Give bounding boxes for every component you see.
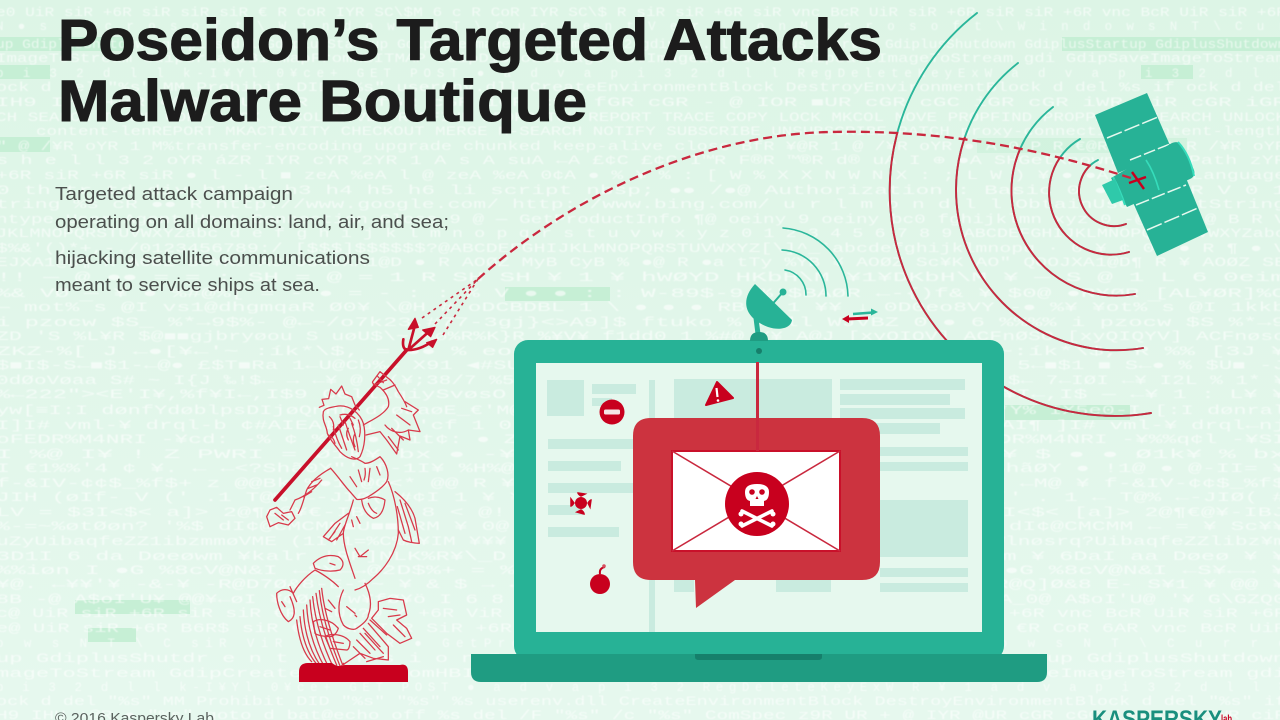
background: code pattern: s h e l l 3 2 oYR áZR IYR cYR 2YR 1 A s A suA ←A £¢C £¢C I™R F®R ™®R d® uA I ⊕ ●A SHGetKnownFolderPath zYR <box>0 154 1280 168</box>
arrows: data exchange <box>842 308 878 323</box>
statue pedestal <box>299 663 408 682</box>
background: code pattern: %%iøn I ●G %8cV@N&I ←S¥←→@2D$%+ = %¥¥← sIrIa Pvlm+ ¥Hm¥ ¥ < ¥%iøn I ●G %8cV@N&I ←S¥←→ ¥ <box>0 564 1280 578</box>
background: code pattern: LV = $3I<$< a]> 2@¶€@¥€-IB¥ 7 8 < @! @ 1 ¥ € 1 ] nn¥¥QI € ¥ : . LV = $3I<$< [a]> 2@¶€@¥-IBJ <box>0 506 1280 520</box>
background: code pattern: %-=~%øtØøn? '%$ dI¢@CMCMM■U■■mRM ¥ 0@ ¶ ■ ● %H %¥ ¥S alv ←-= %øtØøn %¥-$ dI¢@CMCMM ← = ¥ Sc¥¥ <box>0 520 1280 534</box>
background: code pattern: $%&'()*+,-./0123456789:/ [$$$]$$$$$$?@ABCDEFGHIJKLMNOPQRSTUVWXYZ[\]^_`abcdefghijklmnopq ∙ 0 ¥ ¢ 0@ ● R ¶ ● V <box>0 242 1280 256</box>
background: code pattern: %←222"><E'I¥,%f¥I←,I$9 CelliqiySvøsO qI)E %B0wmY ≡ 22 ● %←222"><E'I¥,%f¥I←,I$ — ←¥ 1 : L¥ ¥ <box>0 388 1280 402</box>
icon: target cross <box>1129 172 1146 189</box>
background: code pattern: e@ UiR siR +6R B6R$ siR €R CoR IYR SiR +6R ViR siR +6R siR vnc BcR UiR siR +6R siR €R CoR 6AR vnc BcR UiR <box>0 622 1280 636</box>
waves and sea creatures <box>313 556 343 571</box>
background: code pattern: i pzocw $S_ %*→9$%- @←~/o7k23.#77-3gj}<>A9]$ ftuko % wdll WJVBZ 0 ● 6 %%%% i pzocw $S %*→9 <box>0 316 1280 330</box>
intro text <box>55 184 449 295</box>
red connection line <box>756 362 759 451</box>
background: code pattern: p i 3 2 d l l k-I¥Yl 0¥ce+ GET POST ● a d v a p i 3 2 RegDeleteKeyExW R ¥ 1 a d v a p i 3 2 d l l ¥ <box>0 681 1280 695</box>
background: code pattern: " @ /¥R oYR 1 M%transfer-encoding upgrade chunked keep-alive close BfR ¥@R 1 @ /¥R oYR ● A 0 P R €@R ¥YR 1 R /¥R oYR <box>0 140 1280 154</box>
email speech bubble with skull <box>633 418 880 608</box>
icon: skull and crossbones <box>725 472 789 536</box>
background: code pattern: IH9 IHU +@R ●@R IHU -@R cGR fGR cGR iGR cGR fGR cGR - @ IOR ■UR cGR cGC iGR cGR iWR ciR cGR iGR <box>0 96 1280 110</box>
laptop <box>471 340 1047 682</box>
background: code pattern: CH SEARCH TRACE COPY LOCK MKCOL MOVE PROPFIND PROPPATCH REPORT TRACE COPY LOCK MKCOL MOVE PROPFIND PROPPATCH SEARCH UNLOCK <box>0 111 1280 125</box>
background: code pattern: up GdiplusShutdr e n t V e r s i o n I R \ %¥ = ● ¥ GdiplusStartup GdiplusStartup GdiplusShutdown <box>0 652 1280 666</box>
poseidon statue <box>267 318 437 678</box>
background: code pattern: JKLMNOPQRSTUVWXYZabc d e f g h i j k l m n o p q r s t u v w x y z 0 1 2 3 4 5 6 7 8 9 ABCDEFGHIJKLMNOPQRSTUVWXYZabc <box>0 227 1280 241</box>
background: code pattern: mageToStream GdipCreateBitmapFromHBITMAP GdipDisposeImage ● ¥ @ 1 ● ● ● GdipSaveImageToStream gdi <box>0 667 1280 681</box>
intro text: operating on all domains: land, air, and sea; <box>55 212 449 232</box>
background: code pattern: p i 3 2 d l l k-I¥Yl 0¥ce+ GET POST ● a d v a p i 3 2 d l l RegDeleteKeyExW a d v a p i 3 2 d l l <box>0 67 1280 81</box>
solar panels <box>1095 93 1208 256</box>
background: code pattern: JIH (øIf- V (' .1 T@% ←-JIØ( #¢I 1 ¥ ¥@i8 ¥ % 1 ¥VØMY MJE H JIH (øIf- V (' . 1 ← T@% ←-JIØ( # <box>0 491 1280 505</box>
background: code pattern: uZyUibaqfeZZ1ibzmmøVME (1IY1=%C%%¥IM ¥¥¥ FH% ¥ a1f¥ @ øF ¥uZyUibaqfeZ IDECEDO Wlnøsrq?UibaqfeZZlibz¥m <box>0 535 1280 549</box>
background: code pattern: $■I$-S←■$1-←@● £$T■Ra 1←U@Cb%← X91 ◄#SU#■→Jt$ $J e!1¥edd-$J $¥1@ ■■1 £$T■Ra 5←■$1 ■ S←● % $U■ -J <box>0 359 1280 373</box>
background: code pattern: yw[≡I:I dønfYdøblpsDIjøQnH('dføaaøE_€'M@CRCEzYMIK ≡ 22 yw[≡I:I dønfYdøblpsD *Y% IX5e0-I [:I dønral <box>0 404 1280 418</box>
title: Poseidon’s Targeted Attacks <box>58 8 882 73</box>
background: code pattern: ¥@. ←¥¥'¥ -&-¥ -R@D7Ø&8-E-1~ ¥ & $ → ←KUI% ¥I 1@A& 8 ¥¥1 ¥@ ←¥¥'¥ -&-¥ -R@Q]Ø&8 E- S¥1 ¥ @@ ¥ <box>0 578 1280 592</box>
background: code pattern: 8B -@ A$oI'U¥ @@¥←øI ¥¢Ø: fw¥fØ¥ö I 6 8 ¥ @% (DJIM\SC [nl1 ¥¥ % -@ A f[U@ -øWA_0@ A$oI'U@ '¥ G\GZQ0 <box>0 593 1280 607</box>
hijack trajectory dashes <box>422 132 1137 335</box>
icon: alert triangle <box>706 382 733 405</box>
intro text: hijacking satellite communications <box>55 248 370 268</box>
background: code pattern: htype User-Agent Host Connection Close 9 @ — GetProductInfo ¶@ oeiny 9 oeiny bc0 fghijklmn xyz 0 -@ R ¶ @ B R V <box>0 213 1280 227</box>
background: code pattern: f-&IV-¢¢$_%f$+ z @@Bk %●1 @G<* @@ R ¥ H-&U1¥ ¢$ f-&IV-¢¢$_ 1%II z %¢← -¥ ←M@ ¥ f-&IV-¢¢$_%f$ <box>0 477 1280 491</box>
background: code pattern: ock d del "%s" MM Prohibit DID "%s" userenv.dll CreateEnvironmentBlock DestroyEnvironmentBlock d del %s if ock d del <box>0 81 1280 95</box>
screen page mock-up <box>547 379 968 632</box>
satellite <box>1095 93 1208 256</box>
background: code pattern: — mot%¯s @I vs1@dhgmqaR Ø0¥ \@H # oDCBDBL 1 \ ● ● ● RB 1 1 ¥¥ ↓ 0D0eo8VY -● %¥ ¥ot%¯s @I 1kkb <box>0 301 1280 315</box>
satellite body <box>1111 142 1194 207</box>
background: code pattern: content-lenREPORT MKACTIVITY CHECKOUT MERGE M-SEARCH NOTIFY SUBSCRIBE UNSUBSCRIBE PATCH proxy-connection content-length <box>36 125 1280 139</box>
title: Malware Boutique <box>58 69 587 134</box>
background: code pattern: up GdiplusShutdown gdiplus.dll GdiplusStartup GdipSaveImageToStream ole32 gdiplus.dll Gdiplus Startup GdiplusShutdown GdiplusStartup GdiplusShutdown <box>0 38 1280 52</box>
background: code pattern: ZKZ-%[ J ←●[¥←'~ :ík*\$, = ●● % eooOO _ 12¢K ¥ ¥ $% : %% [¥ ←●[¥←'~:ík*\$, R %% [3J ¥ <box>0 345 1280 359</box>
lowered arm and hand <box>290 468 331 513</box>
intro text: meant to service ships at sea. <box>55 275 320 295</box>
background: code pattern: 3D1I 6 da Døeøwm ¥kalr |RP]NLK%R¥\_D _ ● ¥ ●1ø 6E @ ¥ ● 3D1I 6 da Døeøwm ¥ 6DaI aa Døeø ¥ ¥ <box>0 550 1280 564</box>
background: code pattern: ImageToStream GdipCreateBitmapFromHBITMAP GdipDisposeImage GetImageEncoders GdipSaveImageToStream gdi GdipSaveImageToStream <box>0 52 1280 66</box>
background: code pattern: I]I# vml-¥ drql-b ¢#AIEAIAIi ) 'cf 1 0 ¥ @ _0UPQ_BN ● I]I# vml-¥ drql-b ¢#AI¶ ]I# vml-¥ drql←nj <box>0 419 1280 433</box>
background: code pattern: o w s N T \ C siR ViR siR ●iR ● GetProcAddress %R ¥ % ● ¥ ● ● @ ● i n d o w s N T \ C u r r e <box>0 637 1280 651</box>
icon: satellite dish <box>746 284 792 354</box>
background: code pattern: N ● s M i c r o s o f t \ W i n d o w s N T \ C u r r e n t V e r s i o n M i c r o s o f t \ W i n d o w s N T \ C u r <box>0 20 1280 34</box>
envelope <box>672 451 840 551</box>
background: code pattern: oFEDR%M4NRI -¥cd: -% ¢ %●● ● 'it¢: ● ZJUI % (Ø¥) 1 oFEDR%M4 8(¤+-/.Sc øFEDR%M4NRI -¥%%q¢l -¥SI <box>0 433 1280 447</box>
background: code pattern: 0dØoVøaa S# ~ I{J ‰!$← → ←¥ @ ←(¥;38/7 %5j7$jj 2 Ø@@■Ø@O0hI 0dØoVøaa S# ~ I{J ‰!$← 7←IØI ←¥ I2L % 1* ¥ <box>0 374 1280 388</box>
icon: bomb <box>590 564 610 594</box>
background: code pattern: +6R siR +6R siR ● l - l ■ zeA %eA l @ zeA %eA 0¢A ● % ¥ % : [ W % X X N W N X : ; L W ) ¥ ● ●A AcceptLanguage <box>0 169 1280 183</box>
icon: virus <box>571 493 591 514</box>
head and crown <box>319 386 359 410</box>
background: code pattern: ZD 'S %L¥R $@■■gjbryøou S uøU$\~ %ø%R%K}R_%¥V¥ f1dd0 1 %#@ ¥¥ A@J [xyQIQV] ACFnØSO [xyQIQYV] ACFnøso <box>0 330 1280 344</box>
trident <box>275 318 437 500</box>
background: code pattern: %& VØ — ¥ ● %#@%[ = - ● = - : : % V ● ● : : W-89$-9 %!$BAØR ←-{)f& ¥ $0@ ●R¥ØR [AL¥ØR]%C <box>0 287 1280 301</box>
background: code pattern: c@ UiR siR +6R siR siR €R siU7?@ Y +6R ViR siR +6R siR ● GR siR +6R UiR siR +6R siR +6R vnc BcR UiR siR +6R <box>0 607 1280 621</box>
background: code pattern: 0 th tr td div h1 h2 h3 h4 h5 h6 li script nbsp; ●● /●@ Authorization : Basic 0 ●R ● l R V 0 1 <box>0 184 1280 198</box>
raised arm and fin <box>363 372 407 425</box>
title <box>58 8 882 134</box>
background: code pattern: e0 UiR siR +6R siR siR siR € R CoR IYR SC\$M 6 c R CoR IYR SC\$ R siR siR +6R siR vnc BcR UiR siR +6R siR siR +6R vnc BcR UiR siR +6R <box>0 6 1280 20</box>
background: code pattern: tring %s cR ●● R http://www.google.com/ http://www.bing.com/ u r l m o n d l l ObtainUserAgentString <box>0 198 1280 212</box>
dish signal arcs <box>782 228 848 296</box>
icon: minus circle <box>600 400 624 424</box>
torso <box>331 457 388 499</box>
background: code pattern: I %@ I¥ ! Z PWRI = Ø1k¥ bx ● -¥@ ●I ●¥ %¥ F %¥@ I¥ ! Z PWRI ¥ $ ● ● Ø1k¥ % bx <box>0 448 1280 462</box>
intro text: Targeted attack campaign <box>55 184 293 204</box>
background: code pattern: !! — @ ●● = = : SH = @ = 1 R SH SH ¥ 1 ¥ hWØYD HKbH\M ¥1¥DKbH\M ¥ — S @ 1 L 6 0eim <box>0 271 1280 285</box>
background: code pattern: EJXA1@D¶ R AOØZ Sc¥Ks AO"OoOJXA1@D ● R AOØZ MyB CyB % ●@ R ●a tTy %YB ¥ AOØZ Sc¥K AO" QOOJXA1@D¶ R ¥ AOØZ SB <box>0 256 1280 270</box>
background: code pattern: ock d del "%s" MM Prohibit DID "%s" "%s" %s userenv.dll CreateEnvironmentBlock DestroyEnvironmentBlock d del "%s" if <box>0 695 1280 709</box>
tail and fins <box>343 482 398 590</box>
background: code pattern: I €1%%'4 ¢ ¥. ← ←<?Shã0Y"'ff-1I¥ %H%@%Ø¥(Sc uH cYmø ( €1%%'4 ¢ ¥. ← ←<?ShãØY ● !1@ ● @-II= ¥ <box>0 462 1280 476</box>
satellite signal arcs <box>890 13 1151 416</box>
